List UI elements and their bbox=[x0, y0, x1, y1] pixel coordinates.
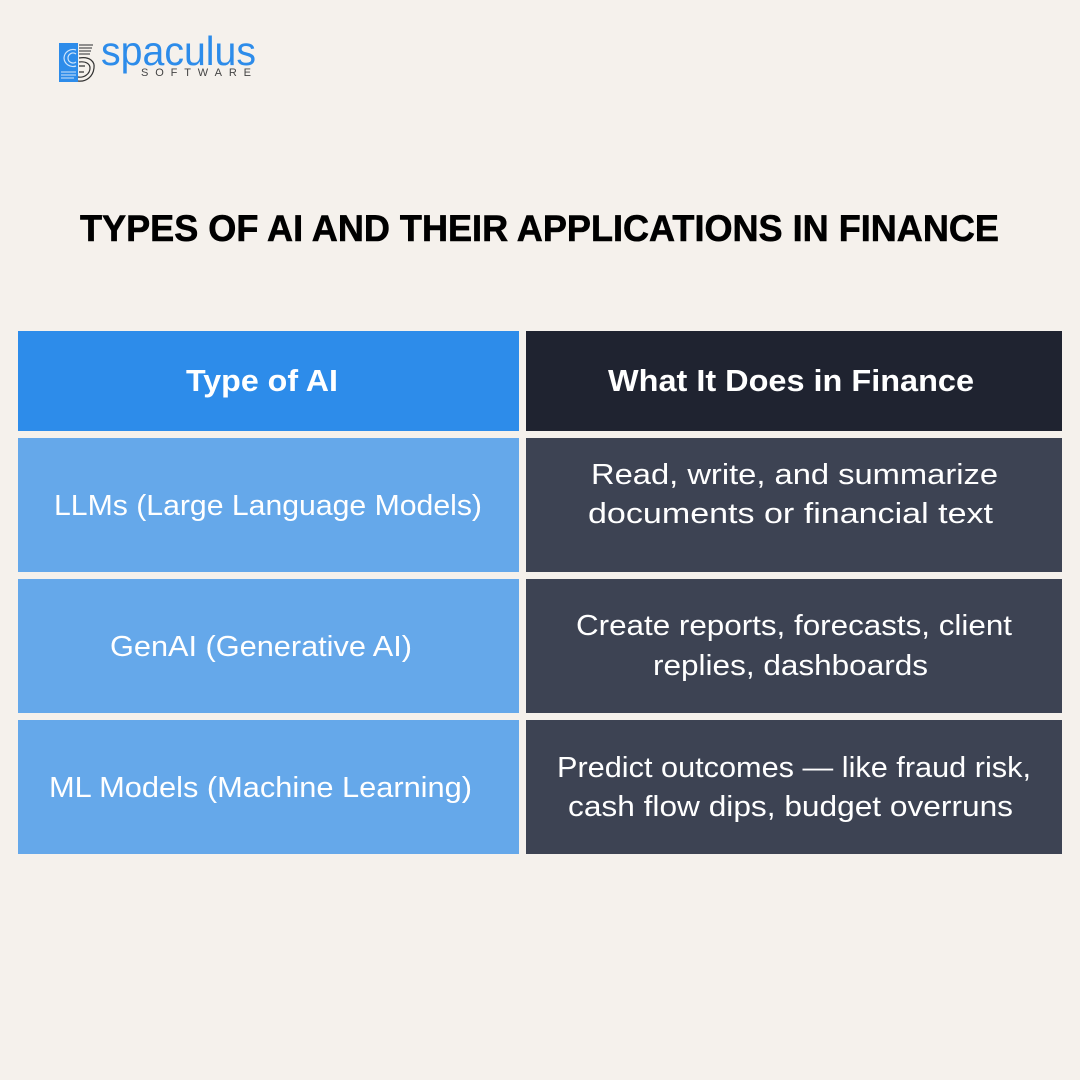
row: ML type bbox=[18, 720, 519, 854]
row: GenAI type bbox=[18, 579, 519, 713]
logo wordmark: spaculus bbox=[101, 28, 256, 74]
row: GenAI description: replies, dashboards bbox=[653, 650, 928, 682]
row: LLMs description: documents or financial text bbox=[588, 498, 993, 530]
row: GenAI description bbox=[526, 579, 1062, 713]
row: ML description: cash flow dips, budget overruns bbox=[568, 791, 1013, 823]
title: TYPES OF AI AND THEIR APPLICATIONS IN FINANCE bbox=[80, 208, 999, 249]
row: LLMs description: Read, write, and summarize bbox=[591, 459, 998, 491]
header: type of AI: Type of AI bbox=[186, 363, 338, 398]
header: what it does in finance: What It Does in Finance bbox=[608, 363, 974, 398]
row: LLMs type: LLMs (Large Language Models) bbox=[54, 490, 482, 522]
logo: spaculus software bbox=[59, 28, 256, 82]
icon: logo mark bbox=[59, 43, 94, 82]
row: ML type: ML Models (Machine Learning) bbox=[49, 772, 472, 804]
header: what it does in finance bbox=[526, 331, 1062, 431]
row: ML description: Predict outcomes — like fraud risk, bbox=[557, 752, 1031, 784]
row: LLMs description bbox=[526, 438, 1062, 572]
table bbox=[18, 331, 1062, 854]
row: GenAI description: Create reports, forecasts, client bbox=[576, 610, 1012, 642]
row: GenAI type: GenAI (Generative AI) bbox=[110, 631, 412, 663]
header: type of AI bbox=[18, 331, 519, 431]
logo subtitle: SOFTWARE bbox=[141, 67, 251, 79]
row: LLMs type bbox=[18, 438, 519, 572]
row: ML description bbox=[526, 720, 1062, 854]
